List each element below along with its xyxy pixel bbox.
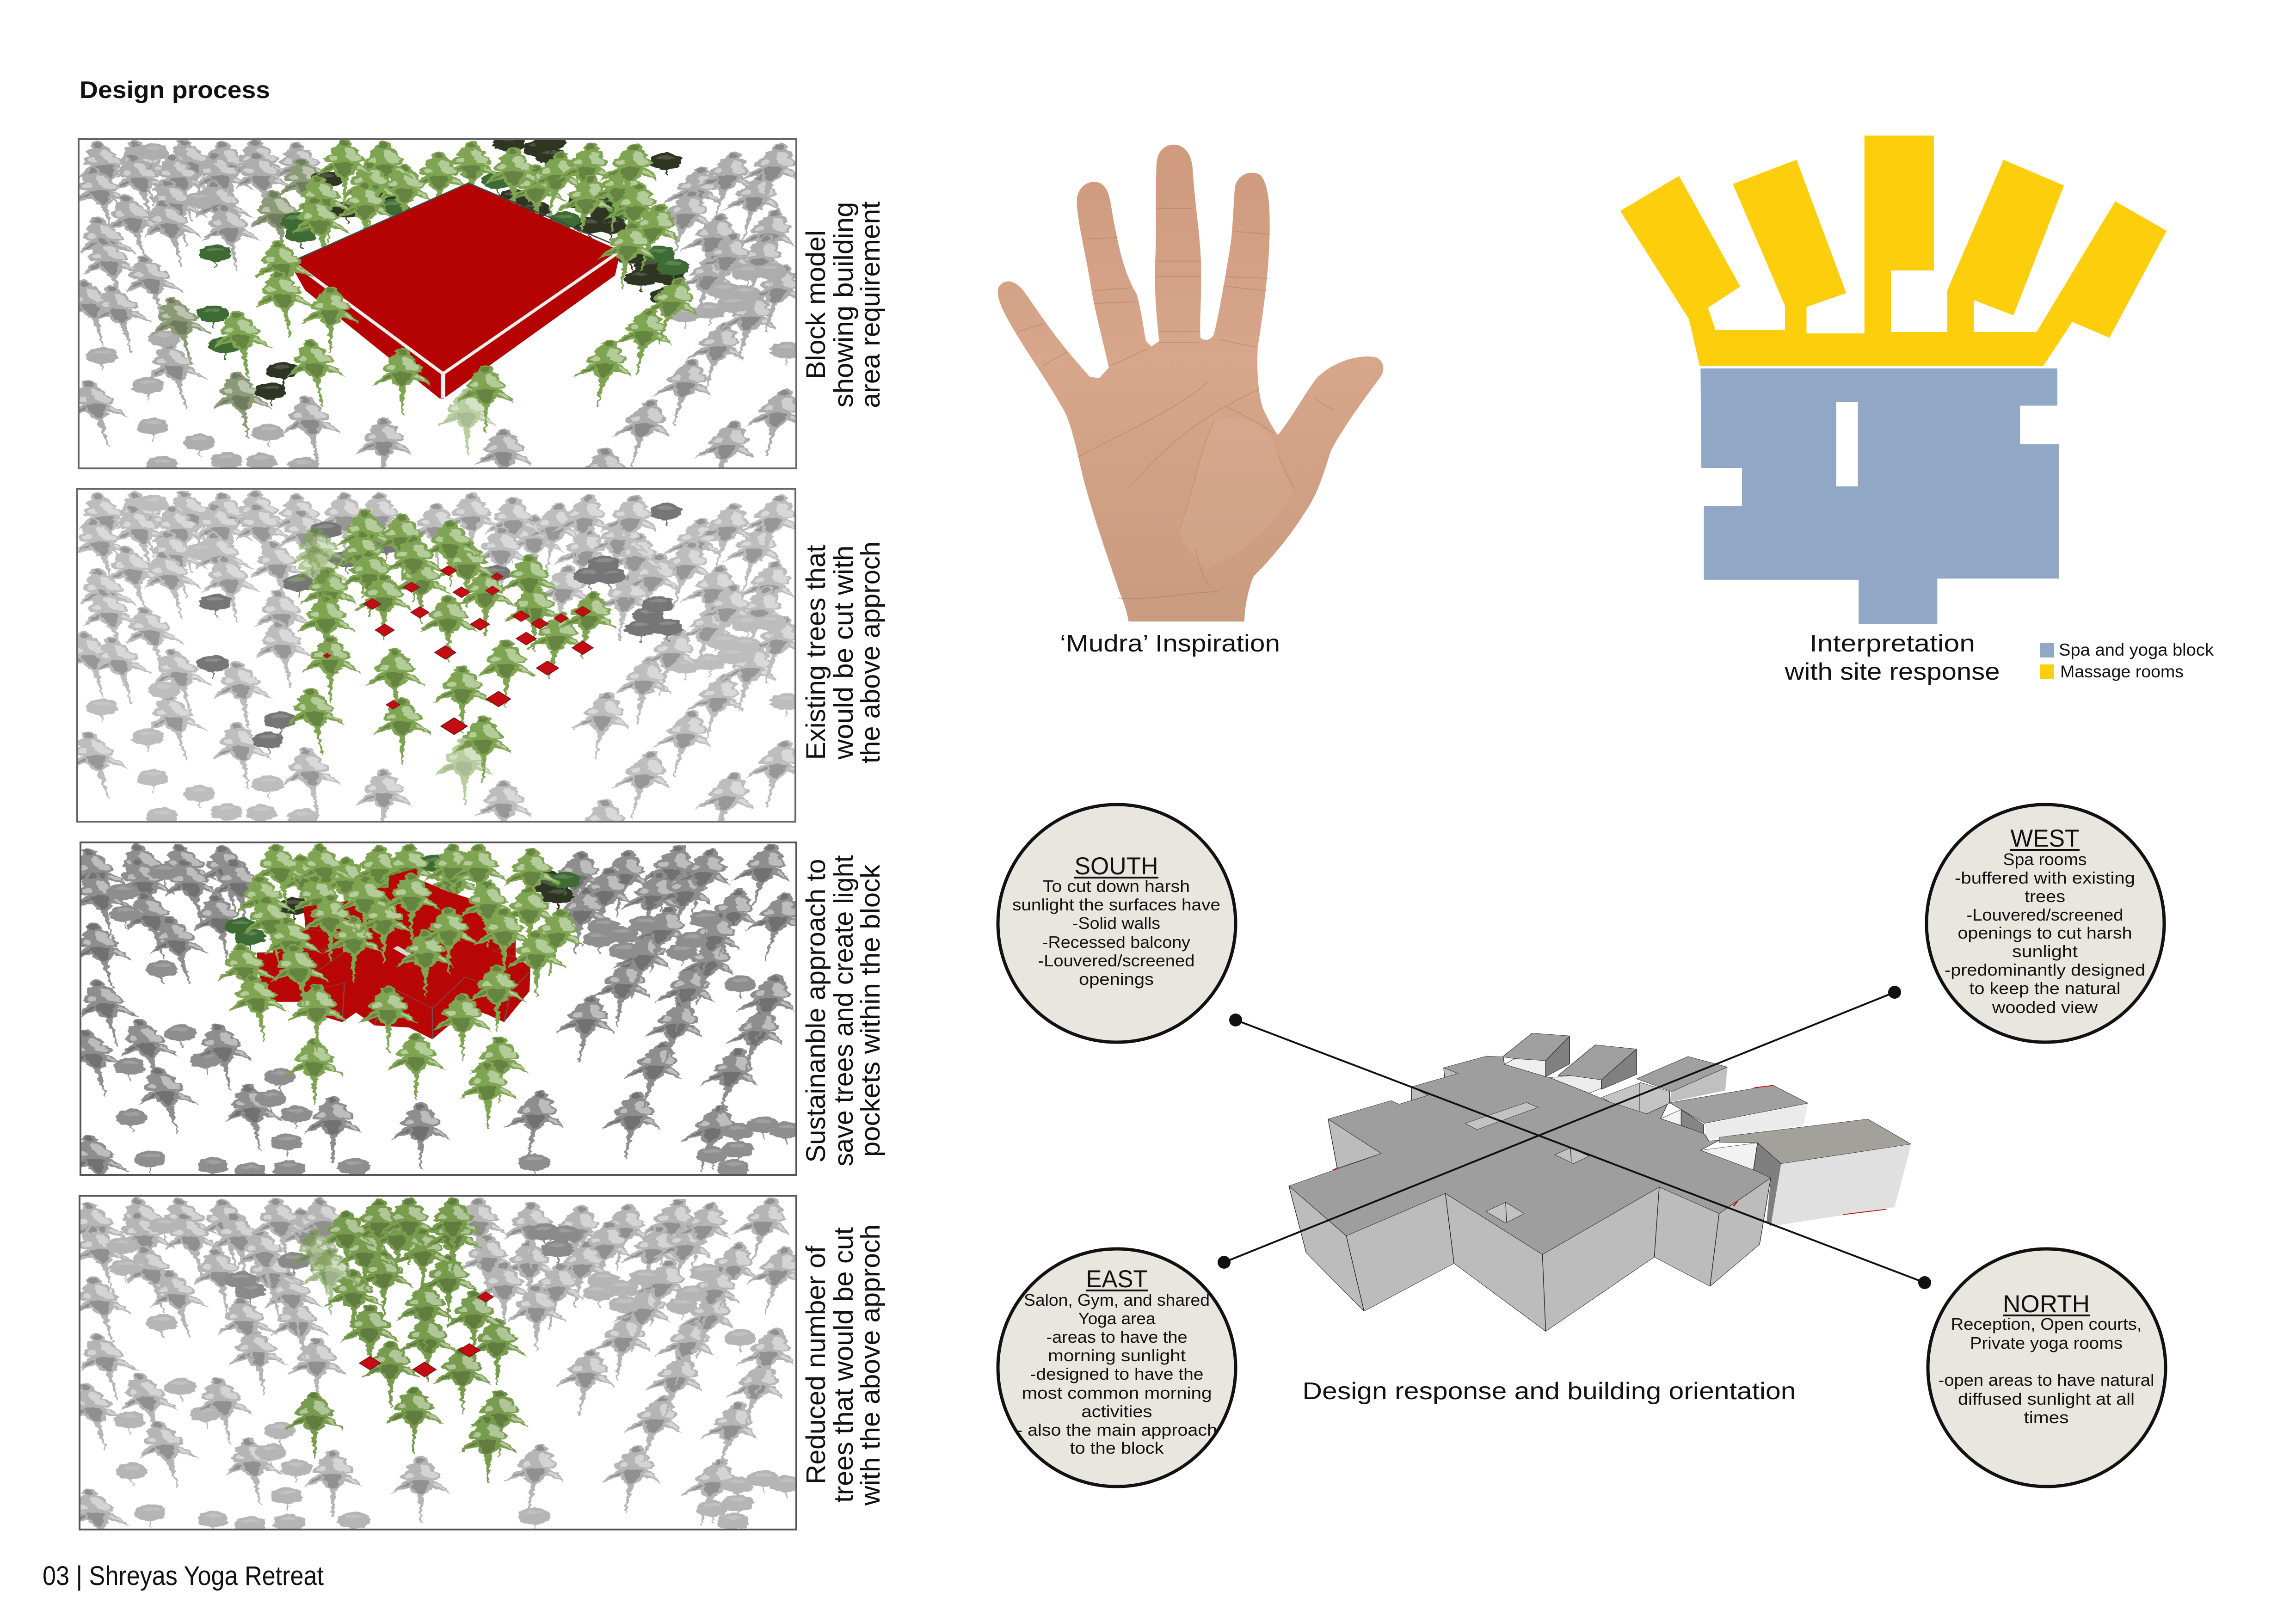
callout: east: -designed to have the bbox=[1030, 1364, 1203, 1383]
panel label: reduced trees: trees that would be cut bbox=[829, 1227, 859, 1503]
title: Design process: Design process bbox=[80, 77, 270, 104]
building walls bbox=[1289, 1068, 1771, 1331]
axis line: south to north bbox=[1229, 1014, 1931, 1289]
panel label: sustainable approach bbox=[801, 855, 886, 1166]
callout: east: - also the main approach bbox=[1016, 1420, 1217, 1439]
panel label: sustainable approach: Sustainanble approach to bbox=[801, 859, 831, 1162]
panel label: existing trees bbox=[801, 541, 886, 763]
callout: south: SOUTH bbox=[1075, 853, 1158, 880]
callout: east: to the block bbox=[1070, 1438, 1164, 1457]
callout: south: To cut down harsh bbox=[1043, 877, 1190, 896]
callout: west: openings to cut harsh bbox=[1958, 923, 2132, 942]
callout: west: sunlight bbox=[2012, 942, 2078, 961]
label: interpretation with site response bbox=[1784, 630, 2000, 685]
axis line: east to west bbox=[1218, 986, 1901, 1269]
callout: east: most common morning bbox=[1022, 1383, 1212, 1402]
panel label: reduced trees: Reduced number of bbox=[801, 1245, 831, 1484]
panel: sustainable approach bbox=[56, 842, 815, 1202]
3d building model bbox=[1289, 1033, 1911, 1331]
legend: Massage rooms bbox=[2060, 662, 2184, 681]
green bushes bbox=[197, 172, 689, 360]
panel label: block model: showing building bbox=[829, 202, 859, 408]
callout: south: sunlight the surfaces have bbox=[1012, 895, 1220, 914]
massage rooms shape bbox=[1620, 135, 2167, 366]
callout: east: Salon, Gym, and shared bbox=[1024, 1290, 1210, 1309]
callout: west: WEST bbox=[2011, 825, 2079, 852]
red tree markers bbox=[323, 565, 593, 735]
green trees behind building bbox=[246, 844, 561, 942]
callout: north: Private yoga rooms bbox=[1970, 1333, 2123, 1352]
spa and yoga block shape bbox=[1700, 369, 2059, 624]
caption: design response: Design response and building orientation bbox=[1302, 1378, 1796, 1405]
panel label: block model: Block model bbox=[801, 230, 831, 379]
label: Mudra inspiration: ‘Mudra’ Inspiration bbox=[1060, 630, 1280, 657]
panel label: sustainable approach: save trees and create light bbox=[829, 855, 859, 1166]
callout: west: wooded view bbox=[1992, 998, 2098, 1017]
callout: south bbox=[998, 805, 1236, 1042]
callout: south: -Recessed balcony bbox=[1042, 933, 1190, 952]
red tree markers bbox=[359, 1292, 494, 1377]
green trees behind the block bbox=[285, 139, 690, 271]
dark bushes bbox=[276, 863, 573, 921]
panel label: block model bbox=[801, 202, 886, 408]
callout: east: -areas to have the bbox=[1046, 1327, 1188, 1346]
callout: north: Reception, Open courts, bbox=[1951, 1315, 2142, 1333]
callout: east: morning sunlight bbox=[1048, 1346, 1186, 1365]
panel label: reduced trees bbox=[801, 1224, 886, 1506]
plan diagram: massage rooms and spa block bbox=[1620, 135, 2167, 624]
panel label: reduced trees: with the above approch bbox=[856, 1224, 886, 1506]
callout: east: Yoga area bbox=[1078, 1309, 1156, 1328]
red block bbox=[294, 183, 621, 399]
thumb mount highlight bbox=[1179, 418, 1293, 570]
footer: page number and project name: 03 | Shreyas Yoga Retreat bbox=[43, 1561, 324, 1591]
label: interpretation with site response: with site response bbox=[1784, 658, 2000, 685]
callout: south: openings bbox=[1079, 970, 1154, 989]
dark bushes behind the block bbox=[255, 132, 684, 406]
callout: east: EAST bbox=[1086, 1266, 1148, 1293]
callout: west: -buffered with existing bbox=[1955, 868, 2135, 887]
panel: existing trees to be cut bbox=[54, 489, 815, 866]
roof bbox=[1289, 1056, 1771, 1254]
red stepped building bbox=[257, 868, 530, 1039]
callout: east: activities bbox=[1081, 1402, 1152, 1421]
callout: west: -Louvered/screened bbox=[1966, 905, 2124, 924]
callout: north: -open areas to have natural bbox=[1939, 1370, 2154, 1389]
panel label: existing trees: would be cut with bbox=[829, 545, 859, 760]
callout: west bbox=[1927, 805, 2164, 1042]
callout: west: to keep the natural bbox=[1969, 979, 2121, 998]
panel: reduced trees cut bbox=[56, 1196, 815, 1555]
legend bbox=[2040, 640, 2214, 681]
panel label: sustainable approach: pockets within the block bbox=[856, 864, 886, 1157]
panel label: existing trees: the above approch bbox=[856, 541, 886, 763]
callout: south: -Solid walls bbox=[1072, 914, 1160, 933]
callout: north: diffused sunlight at all bbox=[1958, 1389, 2135, 1408]
callout: north: times bbox=[2024, 1408, 2069, 1427]
callout: north: NORTH bbox=[2003, 1290, 2090, 1318]
green trees over building bbox=[211, 872, 591, 1129]
panel label: existing trees: Existing trees that bbox=[801, 545, 831, 760]
legend: Spa and yoga block bbox=[2059, 640, 2214, 659]
roof light pockets bbox=[1465, 1103, 1589, 1223]
panel: block model bbox=[78, 138, 797, 469]
image: hand mudra bbox=[998, 145, 1383, 621]
callout: south: -Louvered/screened bbox=[1038, 951, 1195, 970]
panel label: block model: area requirement bbox=[856, 202, 886, 408]
palm and finger creases bbox=[1018, 209, 1334, 599]
callout: west: trees bbox=[2025, 887, 2065, 906]
callout: west: -predominantly designed bbox=[1945, 960, 2145, 979]
green trees bbox=[281, 510, 623, 805]
green trees bbox=[285, 1198, 529, 1483]
green trees in front of the block bbox=[207, 222, 709, 456]
callout: west: Spa rooms bbox=[2003, 850, 2087, 869]
callout: east bbox=[998, 1249, 1236, 1487]
callout: north bbox=[1928, 1249, 2166, 1487]
label: interpretation with site response: Interpretation bbox=[1810, 630, 1975, 657]
